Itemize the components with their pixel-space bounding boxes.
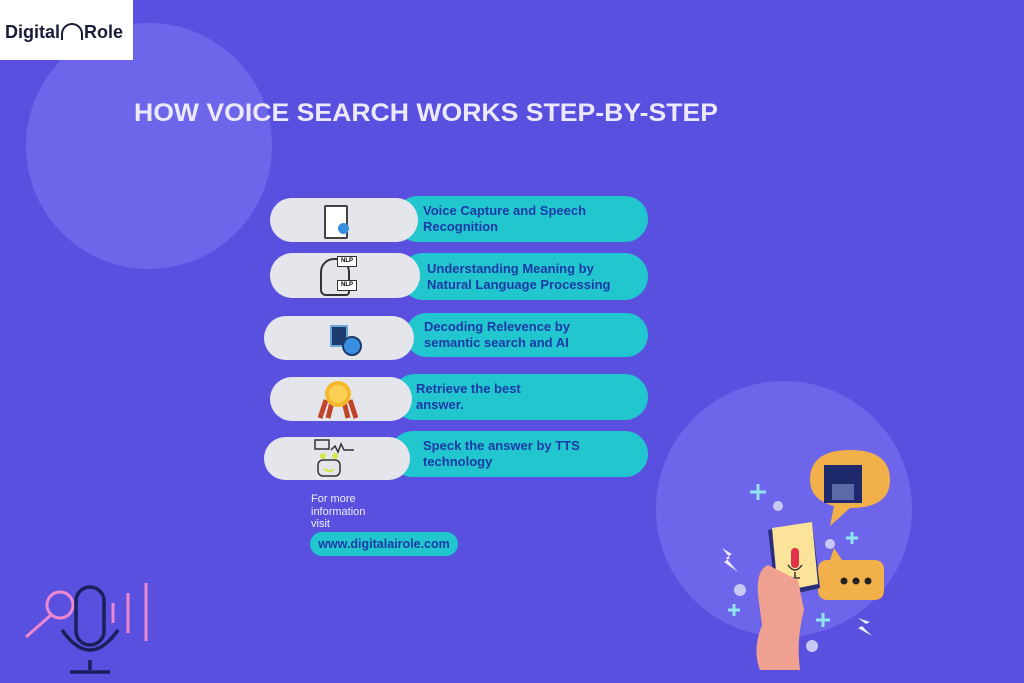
step 3 — [264, 313, 648, 360]
logo — [0, 0, 133, 60]
text: Voice Capture and Speech — [423, 203, 586, 218]
text: NLP — [341, 258, 353, 264]
footer text: visit — [311, 518, 330, 530]
decorative circle left — [26, 23, 272, 269]
illustration: hand with phone and bubbles — [722, 450, 890, 670]
text: semantic search and AI — [424, 335, 569, 350]
text: Natural Language Processing — [427, 276, 610, 292]
text: answer. — [416, 397, 464, 412]
url pill — [310, 532, 458, 556]
footer text: information — [311, 506, 365, 518]
footer text — [311, 493, 365, 530]
text: Decoding Relevence by — [424, 319, 570, 334]
text: Speck the answer by TTS — [423, 438, 580, 453]
url pill: www.digitalairole.com — [318, 537, 450, 551]
icon: AI magnifier — [330, 325, 348, 347]
text: Recognition — [423, 219, 498, 234]
title: HOW VOICE SEARCH WORKS STEP-BY-STEP — [134, 99, 718, 127]
text: Retrieve the best — [416, 381, 521, 396]
step 1 — [270, 196, 648, 242]
text: technology — [423, 454, 492, 469]
icon: mic bottom left — [25, 583, 148, 674]
step 4 — [270, 374, 648, 421]
icon: head NLP — [320, 258, 350, 296]
logo: Digital Role — [5, 22, 123, 42]
footer text: For more — [311, 493, 356, 505]
step 2 — [270, 253, 648, 300]
text: NLP — [341, 282, 353, 288]
icon: phone AI — [324, 205, 348, 239]
decorative circle right — [656, 381, 912, 637]
icon: robot speech — [314, 439, 354, 477]
icon: medal — [318, 381, 358, 419]
text: Understanding Meaning by — [427, 260, 594, 276]
step 5 — [264, 431, 648, 480]
